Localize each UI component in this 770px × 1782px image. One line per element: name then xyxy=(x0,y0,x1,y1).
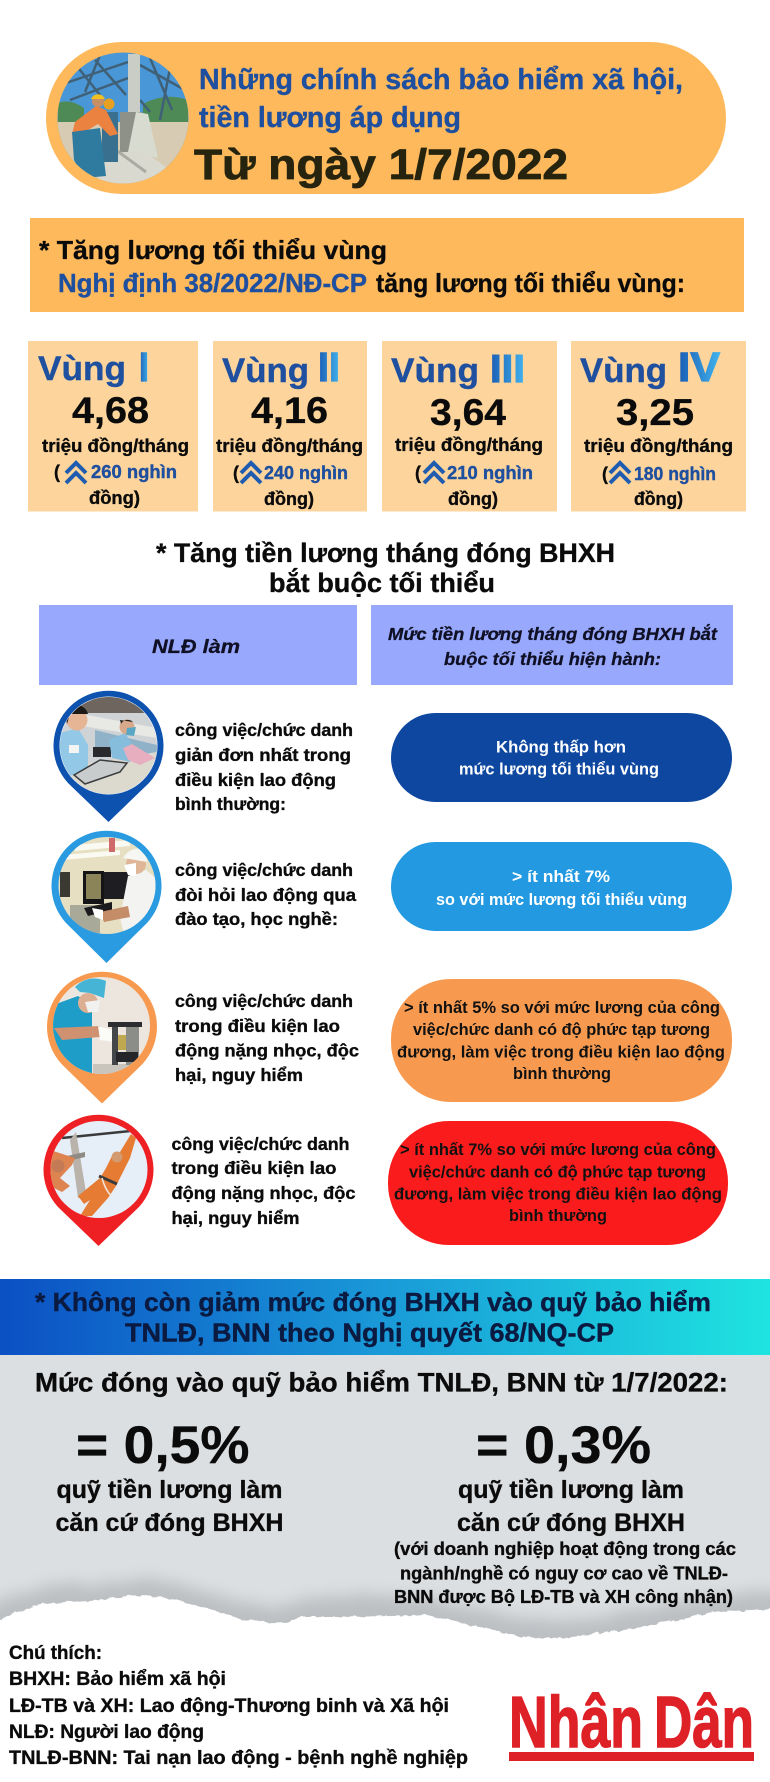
stat: 0,3%: căn cứ đóng BHXH xyxy=(457,1509,685,1537)
panel: Vùng II card xyxy=(213,341,367,512)
pill: at least 7% heavy: việc/chức danh có độ phức tạp tương xyxy=(409,1164,706,1182)
title: tiền lương áp dụng xyxy=(199,102,461,134)
legend: abbreviations xyxy=(9,1643,468,1769)
pill: at least 5%: đương, làm việc trong điều kiện lao động xyxy=(397,1044,725,1062)
heading: minimum monthly salary for social insurance: * Tăng tiền lương tháng đóng BHXH xyxy=(156,538,615,568)
pill: at least 7%: so với mức lương tối thiểu vùng xyxy=(436,891,687,909)
text: hazardous work: trong điều kiện lao xyxy=(175,1016,340,1036)
panel: Vùng III card: III xyxy=(490,348,525,391)
panel: Vùng II card: ( xyxy=(233,463,239,483)
panel: torn paper background xyxy=(0,1355,770,1782)
stat: 0,3%: BNN được Bộ LĐ-TB và XH công nhận) xyxy=(394,1587,733,1607)
panel: Vùng II card: II xyxy=(318,344,340,390)
text: trained work: đào tạo, học nghề: xyxy=(175,909,338,929)
icon: pin with medical-suit worker photo xyxy=(47,972,157,1104)
panel: Vùng IV card: IV xyxy=(678,344,721,390)
panel: regional minimum wage heading xyxy=(30,218,744,312)
legend: abbreviations: NLĐ: Người lao động xyxy=(9,1722,204,1743)
panel: regional minimum wage heading: Nghị định 38/2022/NĐ-CP xyxy=(58,268,367,298)
title xyxy=(194,64,683,189)
pill: not lower than minimum wage xyxy=(391,713,732,802)
text: heavy hazardous work xyxy=(172,1134,356,1228)
text: simple work: công việc/chức danh xyxy=(175,720,353,740)
legend: abbreviations: LĐ-TB và XH: Lao động-Thương binh và Xã hội xyxy=(9,1696,449,1717)
panel: Vùng IV card: triệu đồng/tháng xyxy=(584,436,733,456)
icon: pin with trained worker photo xyxy=(52,831,162,963)
table header: contribution level: Mức tiền lương tháng đóng BHXH bắt xyxy=(388,623,718,644)
panel: Vùng III card: 210 nghìn xyxy=(447,463,533,483)
text: simple work: bình thường: xyxy=(175,794,286,814)
band heading: no more reduced contribution: TNLĐ, BNN theo Nghị quyết 68/NQ-CP xyxy=(125,1318,614,1348)
panel: Vùng III card: đồng) xyxy=(448,489,498,509)
panel: Vùng IV card: 3,25 xyxy=(616,392,694,433)
legend: abbreviations: Chú thích: xyxy=(9,1643,102,1664)
stat: 0,3%: quỹ tiền lương làm xyxy=(458,1476,684,1504)
heading: minimum monthly salary for social insurance: bắt buộc tối thiểu xyxy=(269,567,495,598)
text: hazardous work: công việc/chức danh xyxy=(175,991,353,1011)
text: trained work xyxy=(175,860,356,929)
table header: contribution level xyxy=(371,605,733,685)
stat: 0,5% xyxy=(56,1416,284,1537)
text: hazardous work: động nặng nhọc, độc xyxy=(175,1040,359,1060)
band heading: no more reduced contribution xyxy=(0,1279,770,1355)
pill: at least 5%: việc/chức danh có độ phức tạp tương xyxy=(413,1021,710,1039)
panel: Vùng III card: ( xyxy=(415,463,421,483)
panel: Vùng I card: 260 nghìn xyxy=(91,462,177,482)
panel: Vùng IV card: Vùng xyxy=(580,352,667,390)
pill: at least 5%: > ít nhất 5% so với mức lương của công xyxy=(404,999,720,1017)
legend: abbreviations: BHXH: Bảo hiểm xã hội xyxy=(9,1669,226,1690)
text: simple work xyxy=(175,720,353,814)
icon: pin with garment workers photo xyxy=(53,691,163,822)
panel: Vùng IV card: ( xyxy=(602,464,608,484)
table header: contribution level: buộc tối thiểu hiện hành: xyxy=(444,649,661,669)
pill: at least 7% heavy: bình thường xyxy=(509,1207,607,1225)
heading: minimum monthly salary for social insurance xyxy=(156,538,615,598)
pill: at least 7%: > ít nhất 7% xyxy=(512,868,610,886)
stat: 0,3%: = 0,3% xyxy=(476,1416,651,1475)
text: trained work: công việc/chức danh xyxy=(175,860,353,880)
panel: Vùng I card: Vùng xyxy=(38,350,126,388)
pill: at least 5%: bình thường xyxy=(513,1065,611,1083)
panel: regional minimum wage heading: * Tăng lương tối thiểu vùng xyxy=(39,235,387,265)
legend: abbreviations: TNLĐ-BNN: Tai nạn lao động - bệnh nghề nghiệp xyxy=(9,1748,468,1769)
panel: Vùng III card xyxy=(382,341,557,512)
panel: Vùng I card: ( xyxy=(54,462,60,482)
pill: at least 5% xyxy=(391,979,732,1102)
panel: Vùng II card: Vùng xyxy=(222,352,309,390)
panel: Vùng I card: triệu đồng/tháng xyxy=(42,436,189,456)
stat: 0,5%: quỹ tiền lương làm xyxy=(56,1476,282,1504)
panel: Vùng I card xyxy=(28,341,198,512)
table header: NLĐ làm: NLĐ làm xyxy=(152,637,240,658)
text: simple work: điều kiện lao động xyxy=(175,770,336,790)
panel: Vùng IV card xyxy=(571,341,746,512)
text: trained work: đòi hỏi lao động qua xyxy=(175,885,356,905)
stat: 0,3%: ngành/nghề có nguy cơ cao về TNLĐ- xyxy=(400,1564,728,1584)
text: heavy hazardous work: trong điều kiện lao xyxy=(172,1158,336,1178)
photo: workers at power tower xyxy=(56,52,190,184)
header banner xyxy=(46,42,726,194)
text: heavy hazardous work: động nặng nhọc, độc xyxy=(172,1183,356,1203)
text: heavy hazardous work: hại, nguy hiểm xyxy=(172,1208,300,1228)
panel: Vùng II card: triệu đồng/tháng xyxy=(216,436,363,456)
panel: Vùng IV card: đồng) xyxy=(634,489,683,509)
panel: Vùng III card: triệu đồng/tháng xyxy=(395,435,543,455)
logo: Nhân Dân: Nhân xyxy=(509,1683,643,1763)
pill: at least 7% heavy: đương, làm việc trong điều kiện lao động xyxy=(394,1186,722,1204)
stat: 0,5%: căn cứ đóng BHXH xyxy=(56,1509,284,1537)
pill: at least 7% heavy: > ít nhất 7% so với mức lương của công xyxy=(400,1141,716,1159)
text: hazardous work xyxy=(175,991,359,1085)
text: simple work: giản đơn nhất trong xyxy=(175,745,351,765)
title: Từ ngày 1/7/2022 xyxy=(194,141,568,189)
stat: 0,5%: = 0,5% xyxy=(76,1416,250,1475)
text: heavy hazardous work: công việc/chức danh xyxy=(172,1134,350,1154)
band heading: no more reduced contribution: * Không còn giảm mức đóng BHXH vào quỹ bảo hiểm xyxy=(35,1287,711,1317)
heading: contribution level: Mức đóng vào quỹ bảo hiểm TNLĐ, BNN từ 1/7/2022: xyxy=(35,1368,728,1398)
panel: Vùng IV card: 180 nghìn xyxy=(634,464,716,484)
panel: Vùng III card: Vùng xyxy=(391,352,479,390)
stat: 0,3%: (với doanh nghiệp hoạt động trong các xyxy=(394,1539,736,1559)
panel: Vùng III card: 3,64 xyxy=(430,392,506,433)
pill: at least 7% heavy xyxy=(388,1121,728,1245)
icon: pin with electrical worker photo xyxy=(44,1115,154,1246)
text: hazardous work: hại, nguy hiểm xyxy=(175,1065,303,1085)
panel: Vùng II card: 240 nghìn xyxy=(264,463,348,483)
table header: NLĐ làm xyxy=(39,605,357,685)
panel: regional minimum wage heading: tăng lương tối thiểu vùng: xyxy=(376,268,685,298)
stat: 0,3% xyxy=(394,1416,736,1607)
panel: Vùng II card: đồng) xyxy=(264,489,314,509)
panel: Vùng I card: đồng) xyxy=(89,488,140,508)
panel: Vùng I card: I xyxy=(139,344,149,390)
pill: at least 7% xyxy=(391,842,732,931)
pill: not lower than minimum wage: mức lương tối thiểu vùng xyxy=(459,760,659,778)
panel: Vùng II card: 4,16 xyxy=(251,390,328,431)
title: Những chính sách bảo hiểm xã hội, xyxy=(199,64,683,96)
panel: Vùng I card: 4,68 xyxy=(72,390,149,431)
pill: not lower than minimum wage: Không thấp hơn xyxy=(496,738,626,756)
